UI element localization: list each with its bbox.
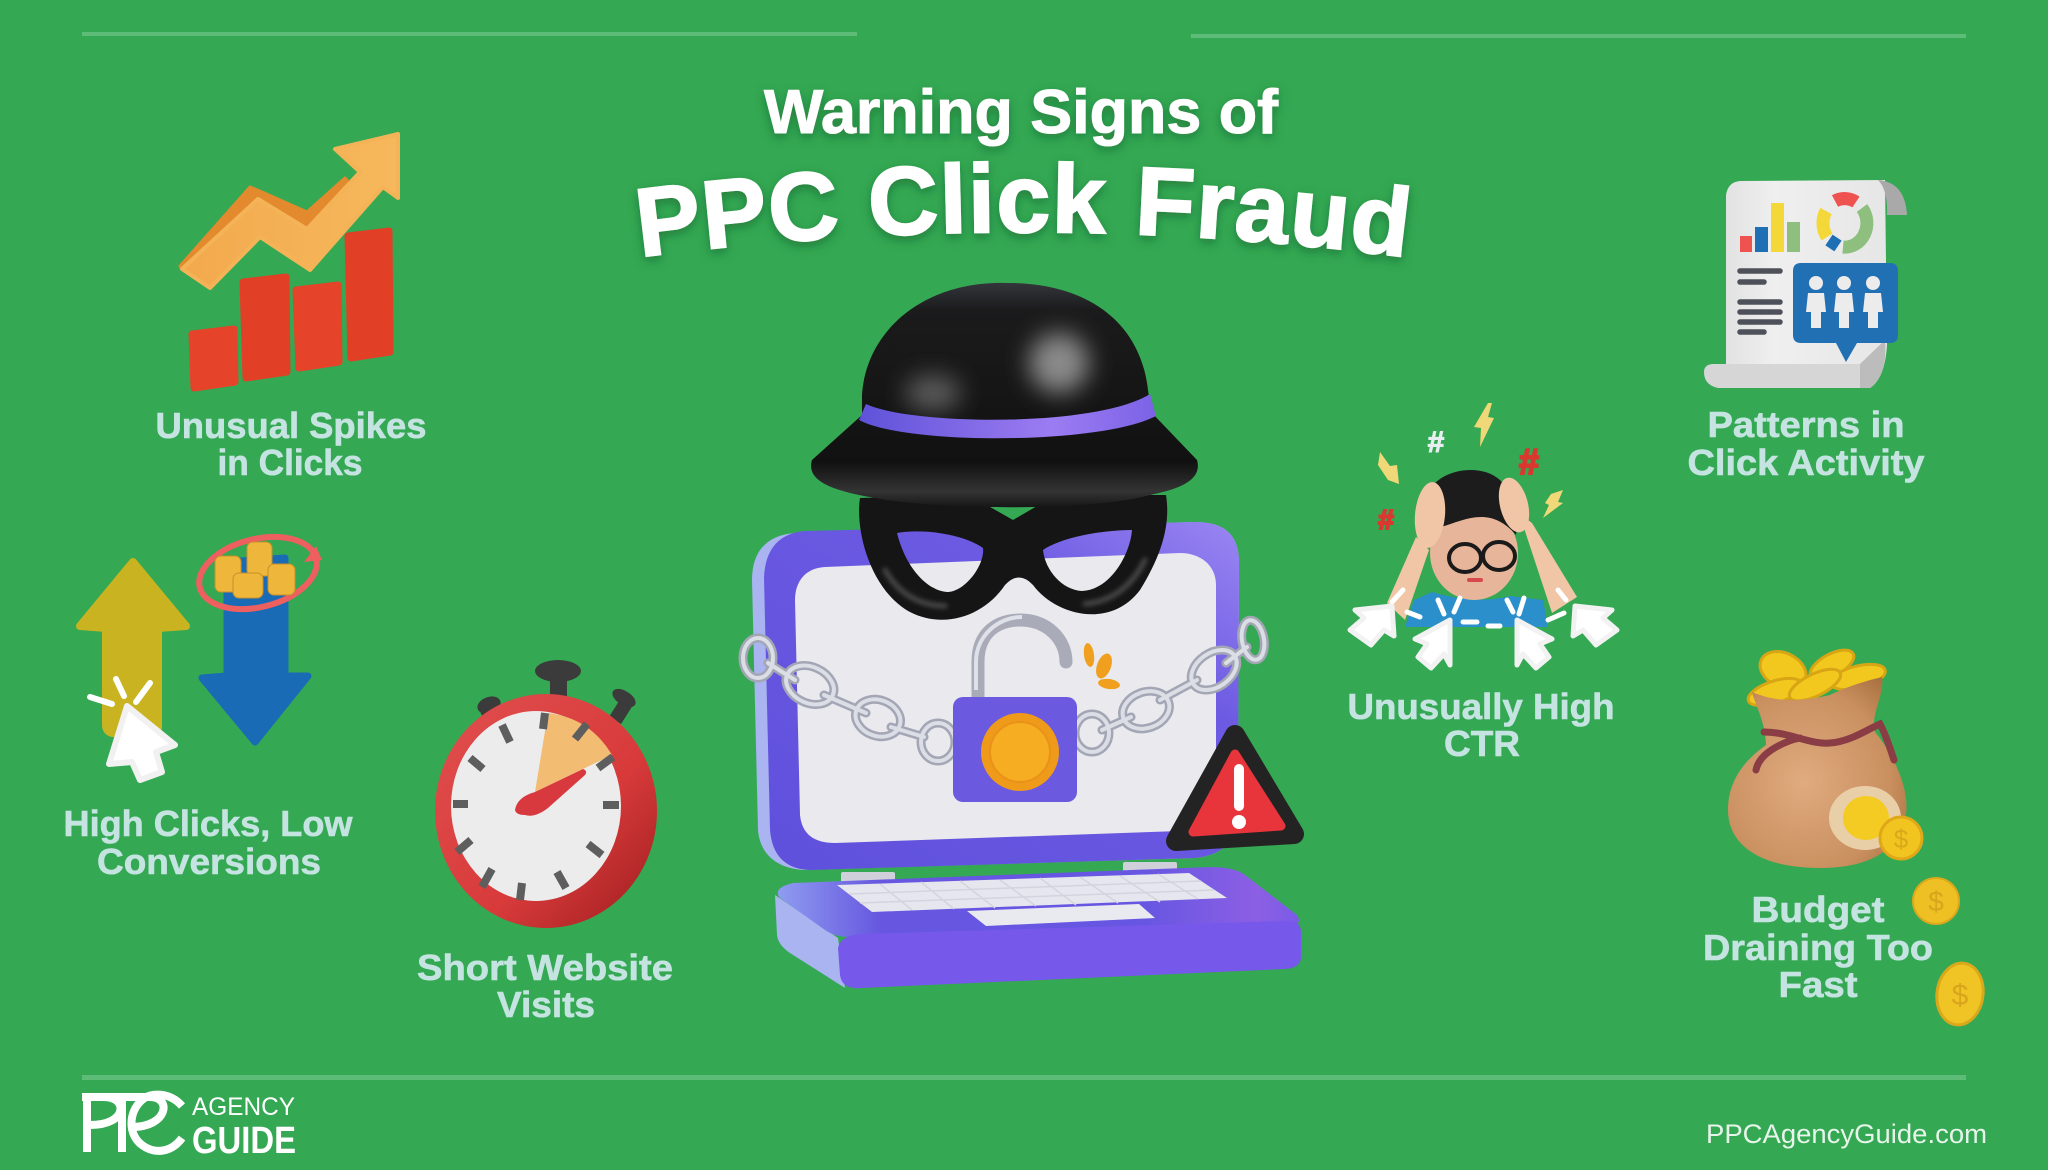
label: short website visits: Short Website (417, 947, 673, 988)
label: budget draining (1703, 889, 1933, 1005)
sparks: # (1428, 426, 1445, 459)
mouth (1467, 578, 1483, 582)
coins and ring (192, 525, 324, 621)
hair (1429, 470, 1517, 535)
arms (1387, 513, 1577, 620)
people card (1793, 263, 1898, 362)
label: short website visits: Visits (497, 984, 595, 1025)
chain (743, 618, 1267, 761)
title: Warning Signs of (764, 78, 1278, 147)
sparks (1378, 403, 1563, 535)
bars (192, 231, 390, 388)
label: budget draining: Fast (1778, 964, 1858, 1005)
tear and coin (1829, 786, 1922, 859)
falling coins (1913, 878, 1987, 1028)
label: high clicks: High Clicks, Low (64, 803, 353, 844)
icon: high clicks low conversions (80, 525, 324, 780)
sparks: # (1378, 504, 1394, 535)
logo (82, 1093, 296, 1162)
top coins (1745, 644, 1888, 711)
label: unusual spikes: Unusual Spikes (156, 405, 426, 446)
label: unusually high ctr: Unusually High (1348, 686, 1614, 727)
click rays (1392, 590, 1566, 626)
logo mark (82, 1095, 182, 1152)
sparks: # (1519, 441, 1539, 482)
text lines (1740, 271, 1780, 332)
label: unusual spikes (156, 405, 426, 483)
bag (1728, 677, 1907, 868)
logo wordmark: GUIDE (192, 1120, 296, 1162)
bar chart (1740, 203, 1800, 252)
logo wordmark: AGENCY (192, 1093, 295, 1121)
icon: stopwatch (435, 660, 657, 928)
title: PPC Click Fraud (634, 160, 1413, 265)
label: patterns in click activity (1688, 404, 1924, 483)
falling coins: $ (1952, 979, 1969, 1012)
icon: stressed person (1350, 403, 1617, 668)
falling coins: $ (1928, 886, 1944, 917)
laptop screen (752, 522, 1239, 870)
down arrow (202, 558, 308, 742)
cursors (1350, 606, 1617, 668)
face (1430, 506, 1518, 600)
label: high clicks (64, 803, 353, 882)
label: short website visits (417, 947, 673, 1025)
label: high clicks: Conversions (97, 841, 321, 882)
label: budget draining: Draining Too (1703, 927, 1933, 968)
cursor (90, 679, 175, 780)
arrow (180, 134, 398, 288)
label: unusually high ctr: CTR (1444, 723, 1520, 764)
mask (859, 495, 1167, 620)
up arrow (80, 562, 186, 733)
laptop base and keyboard (775, 862, 1301, 988)
title (634, 78, 1413, 265)
label: patterns in click activity: Click Activity (1688, 442, 1924, 483)
label: unusually high ctr (1348, 686, 1614, 764)
donut chart (1823, 199, 1867, 247)
shirt (1405, 592, 1548, 627)
tear and coin: $ (1894, 824, 1909, 854)
label: budget draining: Budget (1752, 889, 1885, 930)
icon: report document (1704, 180, 1907, 388)
hat (811, 283, 1198, 507)
icon: rising chart (180, 134, 398, 388)
rope (1756, 724, 1894, 770)
label: patterns in click activity: Patterns in (1708, 404, 1904, 445)
icon: money bag (1728, 644, 1922, 868)
label: unusual spikes: in Clicks (218, 442, 362, 483)
illustration: hacker laptop (743, 283, 1301, 988)
paper (1704, 180, 1907, 388)
website url: PPCAgencyGuide.com (1706, 1119, 1987, 1149)
glasses (1449, 542, 1515, 572)
logo wordmark (192, 1093, 296, 1162)
hands (1412, 474, 1534, 549)
warning triangle (1176, 735, 1294, 841)
padlock (953, 617, 1121, 802)
